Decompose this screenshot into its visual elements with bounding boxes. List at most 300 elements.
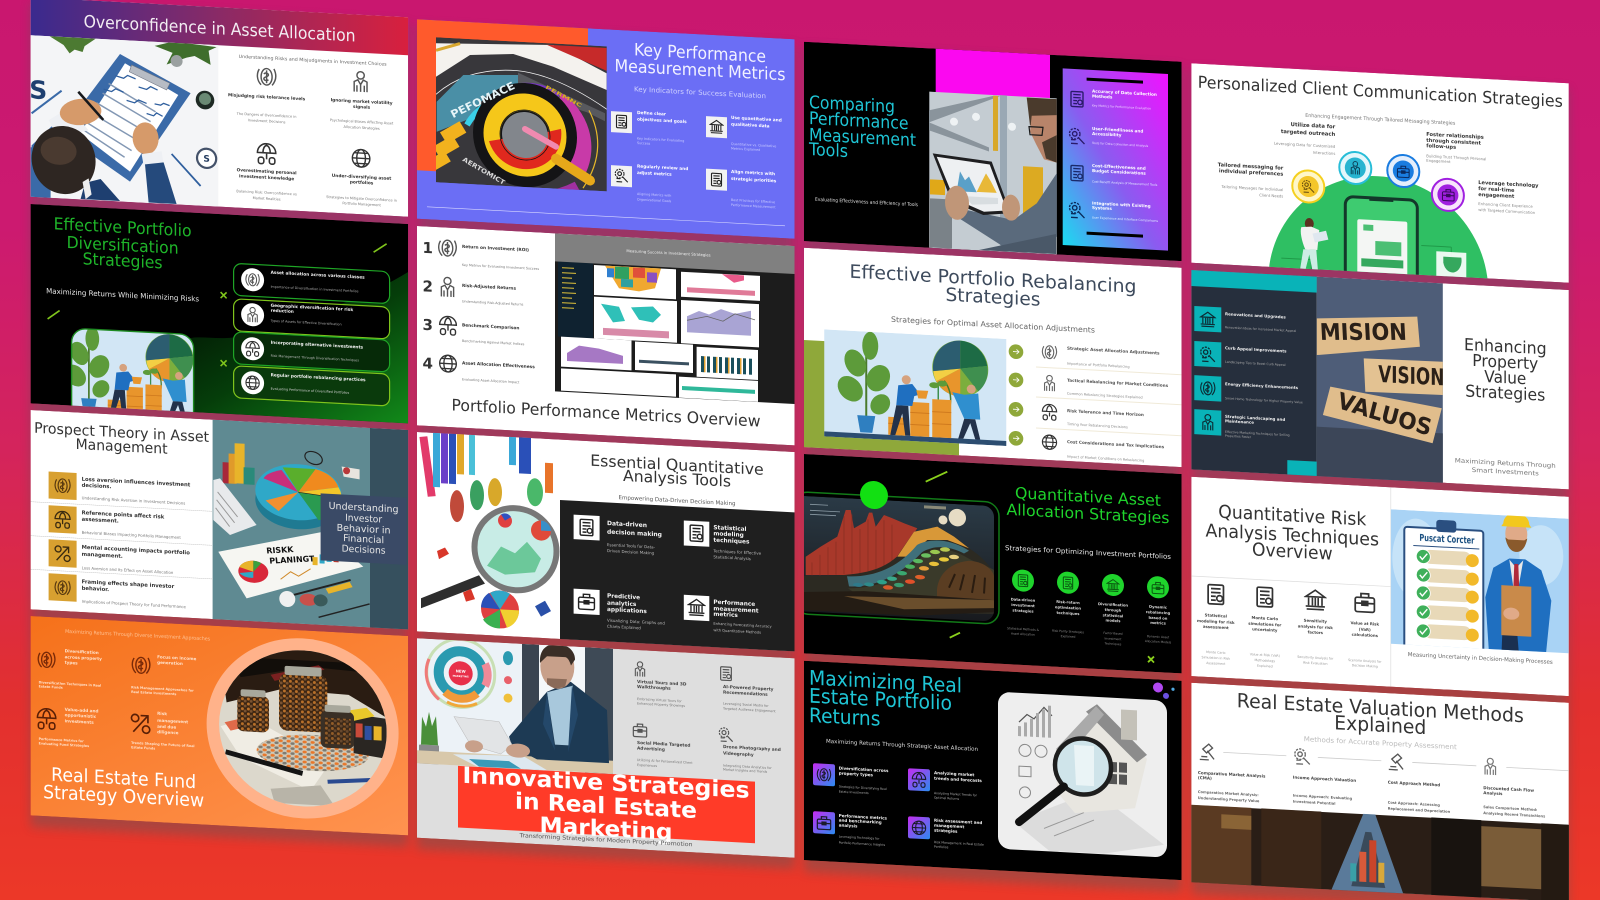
item: value-add: Value-add and (65, 707, 98, 714)
item: framing effects: Framing effects shape investor (82, 579, 175, 590)
card: geographic: Geographic diversification for risk (271, 303, 353, 313)
item: risk-return: techniques (1057, 611, 1080, 616)
item: accuracy: Methods (1092, 93, 1113, 100)
panel: Key Performance Measurement Metrics (417, 19, 794, 239)
item: cost approach: Cost Approach Method (1388, 780, 1440, 787)
photo: dim office with pyramid chart (1191, 805, 1569, 900)
item: loss aversion: Loss aversion influences investment (82, 477, 191, 488)
bars (1087, 78, 1143, 238)
title (850, 262, 1136, 316)
title: Strategies (1465, 382, 1545, 405)
item: performance metrics (813, 811, 887, 847)
item: risk management: and due (157, 724, 176, 730)
item: overestimating (236, 142, 297, 202)
list: rebalancing items: Impact of Market Conditions on Rebalancing (1067, 455, 1144, 463)
title: Comparing (809, 93, 895, 118)
item: cost-effectiveness: Budget Considerations (1092, 168, 1146, 176)
list: rebalancing items: Risk Tolerance and Time Horizon (1067, 408, 1144, 417)
item: curb appeal: Landscaping Tips to Boost Curb Appeal (1225, 360, 1286, 367)
title: Marketing (540, 813, 672, 846)
item: user-friendliness (1070, 125, 1149, 148)
panel: Quantitative Risk Analysis Techniques Overview (1191, 477, 1569, 696)
item: AI-powered (721, 667, 776, 713)
title: Explained (1334, 711, 1426, 739)
card: geographic: reduction (271, 308, 294, 315)
title: Estate Portfolio (809, 683, 952, 715)
title: Real Estate Valuation Methods (1237, 689, 1524, 727)
item: value at risk: calculations (1352, 632, 1379, 638)
item: under-diversifying: Strategies to Mitigate Overconfidence in (326, 195, 397, 203)
item: monte carlo (1248, 587, 1281, 669)
item: comparative market analysis: (CMA) (1198, 775, 1212, 781)
item: framing effects (49, 573, 187, 609)
item: quantitative data: Quantitative vs. Qualitative (731, 142, 776, 148)
callout: understanding investor behavior: Financial (343, 533, 384, 546)
title: Strategy Overview (43, 782, 204, 812)
item: social media: Social Media Targeted (637, 740, 690, 749)
item: social media: Experiences (637, 763, 657, 768)
item: reference points: assessment. (82, 517, 119, 525)
item: under-diversifying: Under-diversifying asset (332, 173, 391, 182)
card: rebalancing: Regular portfolio rebalancing practices (271, 372, 366, 383)
item: define objectives: objectives and goals (637, 116, 687, 125)
text: foster relationships: through consistent (1426, 138, 1481, 147)
dotted dividers (31, 502, 213, 579)
item: define objectives: Define clear (637, 110, 667, 118)
item: data-driven: Data-driven (1011, 597, 1036, 603)
text: utilize data (1274, 121, 1336, 156)
item: data-driven: Essential Tools for Data- (607, 542, 656, 550)
item: diversification: statistical (1103, 613, 1123, 618)
item: curb appeal: Curb Appeal Improvements (1225, 345, 1287, 354)
panel: Prospect Theory in Asset Management (31, 410, 409, 630)
item: curb appeal (1194, 341, 1287, 371)
item: align metrics: Align metrics with (731, 169, 775, 177)
item: user-friendliness: Tools for Data Collection and Analysis (1091, 141, 1149, 148)
title: Allocation Strategies (1006, 501, 1170, 527)
item: diversification (813, 763, 889, 796)
item: AI-powered: Targeted Audience Engagement (722, 706, 776, 713)
teal band (1191, 270, 1317, 293)
item: market trends: trends and forecasts (934, 776, 982, 783)
item: data-driven: Driven Decision Making (607, 548, 655, 556)
card: alternative investments (234, 332, 390, 372)
item: align metrics (706, 168, 777, 209)
title: Measurement (809, 125, 916, 151)
title (462, 763, 750, 850)
list: rebalancing items: Strategic Asset Allocation Adjustments (1067, 346, 1160, 356)
item: sensitivity analysis: factors (1308, 629, 1324, 635)
item: value at risk: Decision Making (1352, 663, 1378, 669)
title: Tools (808, 140, 848, 162)
item: comparative market analysis (1198, 744, 1266, 804)
item: risk management (130, 712, 194, 750)
item: discounted cash flow: Discounted Cash Flow (1483, 785, 1534, 793)
item: AI-powered: AI-Powered Property (723, 684, 774, 693)
item: overestimating: Market Realities (253, 196, 281, 202)
item: risk-return: Risk Parity Strategies (1052, 629, 1084, 634)
decorative marks (926, 471, 1154, 663)
item: performance metrics: analysis (839, 823, 858, 829)
illustration: green circle and phone (1268, 170, 1488, 402)
icon ring: cyan (1339, 151, 1371, 185)
photo: pie chart and risk planning: PLANINGT (269, 554, 315, 566)
item: diversification: Estate Investments (839, 790, 869, 795)
subtitle: Strategies for Optimizing Investment Portfolios (1005, 544, 1171, 561)
title: in Real Estate (515, 789, 697, 824)
photo: businessman with tablet (417, 636, 613, 774)
text: foster relationships: Engagement (1426, 158, 1451, 164)
text: leverage technology: for real-time (1478, 186, 1515, 194)
item: dynamic rebalancing: rebalancing (1146, 610, 1171, 615)
item: diversification: property types (839, 771, 874, 777)
panel: Enhancing Property Value Strategies (1191, 270, 1569, 490)
item: energy efficiency: Energy Efficiency Enhancements (1225, 381, 1299, 390)
decorative marks (47, 243, 387, 367)
panel: Overconfidence in Asset Allocation (29, 0, 408, 217)
subtitle: Maximizing Returns Through Strategic Asset Allocation (826, 739, 978, 753)
panel: Quantitative Asset Allocation Strategies (794, 453, 1182, 673)
item: mental accounting: management. (82, 552, 123, 560)
panel: Portfolio Performance Metrics Overview (417, 226, 795, 445)
left dark column (1191, 270, 1317, 477)
item: performance metrics: and benchmarking (839, 818, 882, 825)
list: numbered metrics: 1 (422, 239, 433, 257)
item: monte carlo: Monte Carlo (1252, 615, 1278, 621)
icon ring: blue (1387, 154, 1419, 188)
photo: wooden blocks: VISION (1378, 362, 1444, 391)
item: drone photography (719, 728, 781, 775)
image: gauge (436, 37, 607, 192)
card: asset allocation (234, 263, 390, 304)
list: numbered metrics (422, 239, 539, 385)
title: Portfolio Performance Metrics Overview (451, 395, 760, 431)
list: numbered metrics: Asset Allocation Effectiveness (462, 360, 535, 370)
title: Overconfidence in Asset Allocation (84, 12, 356, 47)
item: statistical modeling: modeling for risk (1197, 618, 1235, 625)
item: value-add (37, 705, 98, 749)
item: discounted cash flow: Sales Comparison Method: (1483, 805, 1538, 812)
item: social media: Utilizing AI for Personalized Client (637, 758, 693, 765)
green block (804, 340, 959, 456)
item: energy efficiency: Smart Home Technology for Higher Property Value (1225, 396, 1303, 404)
title (1206, 501, 1379, 567)
item: align metrics: Best Practices for Effective (731, 198, 775, 204)
item: define objectives: Key Indicators for Evaluating (637, 136, 684, 143)
item: data-driven (574, 515, 662, 556)
item: value-add: Performance Metrics for (39, 737, 84, 743)
subtitle: Transforming Strategies for Modern Property Promotion (518, 833, 693, 848)
item: risk-return: Explained (1061, 634, 1075, 639)
timeline (1223, 752, 1569, 771)
item: strategic landscaping: Properties Faster (1225, 434, 1252, 439)
item: performance metrics: Performance metrics (839, 813, 887, 821)
list: numbered metrics: Key Metrics for Evaluating Investment Success (462, 263, 539, 271)
subtitle (1455, 457, 1556, 478)
item: mental accounting: Loss Aversion and Its Effect on Asset Allocation (82, 565, 174, 575)
item: renovations: Renovation Ideas for Increased Market Appeal (1225, 325, 1296, 333)
item: reference points: Reference points affect risk (82, 510, 165, 521)
item: cost approach (1388, 754, 1451, 814)
panel: Innovative Strategies in Real Estate Marketing (417, 636, 794, 858)
list: rebalancing items: Common Rebalancing Strategies Explained (1067, 392, 1143, 400)
panel: Real Estate Fund Strategy Overview (31, 616, 408, 835)
item: sensitivity analysis: Sensitivity (1304, 618, 1327, 624)
panel: Comparing Performance Measurement Tools (804, 42, 1182, 261)
item: diversification: Strategies for Diversifying Real (839, 785, 887, 791)
photo: man reviewing clipboard (29, 35, 218, 207)
item: strategic landscaping: Strategic Landscaping and (1225, 414, 1285, 422)
item: income approach: Income Approach Valuation (1293, 775, 1356, 783)
item: virtual tours: Virtual Tours and 3D (637, 679, 687, 688)
item: regular review: Organizational Goals (637, 197, 672, 203)
item: ignoring volatility (330, 70, 394, 132)
text: leverage technology: engagement (1478, 192, 1515, 200)
item: quantitative data (706, 114, 782, 153)
photo: man reviewing clipboard: S (203, 154, 210, 165)
item: value at risk: Value at Risk (1351, 620, 1379, 627)
item: sensitivity analysis (1297, 589, 1334, 666)
subtitle: Understanding Risks and Misjudgments in Investment Choices (239, 54, 387, 68)
text: foster relationships: Foster relationships (1426, 132, 1484, 141)
item: social media (633, 724, 693, 770)
list: numbered metrics: Risk-Adjusted Returns (462, 283, 516, 292)
item: strategic landscaping (1194, 409, 1290, 441)
item: statistical modeling: techniques (713, 538, 750, 546)
list: rebalancing items: Timing Your Rebalancing Decisions (1066, 422, 1128, 429)
item: income generation: Real Estate Investments (131, 690, 176, 696)
title (44, 767, 204, 807)
item: align metrics: Performance Measurement (731, 203, 776, 209)
item: sensitivity analysis: Risk Evaluation (1303, 661, 1328, 666)
text: leverage technology: Leverage technology (1478, 180, 1539, 189)
list: numbered metrics: Return on Investment (ROI) (462, 244, 529, 253)
item: statistical modeling: Statistical Analysis (713, 554, 751, 561)
item: integration (1070, 199, 1158, 223)
photo: pie chart and risk planning: RISKK (266, 545, 295, 556)
item: loss aversion: decisions. (82, 483, 111, 490)
title: Returns (809, 703, 880, 731)
item: income generation: Focus on income (157, 654, 197, 661)
item: value at risk (1348, 593, 1382, 669)
text: foster relationships: Building Trust Through Personal (1426, 153, 1486, 161)
image: gauge: AERTOMICT (461, 156, 507, 187)
item: overestimating: Overestimating personal (237, 167, 297, 176)
title: Property (1472, 351, 1539, 373)
item: reference points (49, 505, 181, 540)
item: statistical modeling: modeling (713, 531, 744, 539)
title: Value (1484, 367, 1526, 388)
header band (31, 0, 408, 55)
title (590, 452, 764, 492)
item: ignoring volatility: Allocation Strategies (343, 125, 380, 131)
subtitle: Evaluating Effectiveness and Efficiency of Tools (815, 197, 918, 208)
list: numbered metrics: Benchmark Comparison (462, 322, 519, 331)
item: misjudging risk: Investment Decisions (248, 118, 286, 124)
item: statistical modeling: Monte Carlo (1206, 650, 1225, 655)
item: income approach: Investment Potential (1293, 800, 1335, 806)
item: value-add: opportunistic (65, 712, 97, 719)
item: performance metrics: Portfolio Performance Insights (839, 841, 885, 847)
item: user-friendliness: User-Friendliness and (1092, 126, 1143, 134)
item: drone photography: Videography (723, 751, 754, 758)
item: income approach: Income Approach: Evaluating (1293, 794, 1353, 801)
item: discounted cash flow: Analyzing Recent Transactions (1483, 811, 1545, 818)
text: leverage technology (1478, 180, 1539, 215)
item: drone photography: Market Insights and Trends (723, 768, 768, 774)
dashboard image (555, 233, 795, 404)
title: Effective Portfolio Rebalancing (849, 262, 1136, 298)
item: risk management: Risk (157, 711, 167, 716)
item: statistical modeling: Simulation in Risk (1202, 655, 1230, 661)
item: quantitative data: qualitative data (731, 121, 770, 129)
item: predictive analytics: Predictive (607, 594, 640, 601)
card: asset allocation: Importance of Diversification in Investment Portfolios (271, 285, 359, 293)
item: comparative market analysis: Comparative Market Analysis: (1198, 790, 1259, 797)
card: alternative investments: Risk Management Through Diversification Techniques (271, 354, 359, 362)
item: framing effects: Implications of Prospect Theory for Fund Performance (82, 599, 187, 609)
icon ring: purple (1432, 178, 1464, 212)
subtitle: Key Indicators for Success Evaluation (634, 85, 766, 100)
text: foster relationships: follow-ups (1426, 143, 1456, 151)
item: diversification across property types: Estate Funds (39, 684, 63, 690)
item: accuracy (1071, 87, 1157, 111)
item: diversification across property types: types (65, 660, 78, 666)
list: numbered metrics: 3 (422, 316, 433, 334)
item: cost approach: Replacement and Depreciation (1388, 807, 1451, 814)
item: diversification: Diversification across (839, 766, 889, 773)
item: data-driven: investment (1011, 603, 1035, 608)
title: Prospect Theory in Asset (34, 421, 209, 446)
item: mental accounting (49, 539, 190, 576)
panel: Real Estate Valuation Methods Explained (1191, 683, 1569, 900)
title: Real Estate Fund (51, 765, 196, 793)
item: comparative market analysis: Understanding Property Value (1198, 796, 1260, 803)
item: comparative market analysis: Comparative Market Analysis (1198, 770, 1266, 779)
title (809, 665, 962, 735)
decorative bubbles (1153, 682, 1175, 699)
title (1237, 689, 1524, 744)
image: house and magnifier (998, 692, 1167, 858)
title: Management (76, 437, 168, 458)
item: define objectives: Success (637, 141, 651, 146)
item: monte carlo: uncertainty (1252, 626, 1278, 633)
item: statistical modeling: Assessment (1206, 661, 1226, 666)
item: under-diversifying: portfolios (350, 179, 374, 186)
item: statistical modeling: assessment (1203, 624, 1229, 630)
text: leverage technology: with Targeted Communication (1478, 207, 1536, 215)
title (1464, 335, 1547, 405)
image: gauge: PERMNC (544, 85, 583, 110)
photo: businessman with tablet: MARKETING (453, 675, 469, 679)
item: user-friendliness: Accessibility (1092, 131, 1122, 138)
item: misjudging risk (228, 67, 306, 125)
item: reference points: Behavioral Biases Impacting Portfolio Management (82, 530, 181, 540)
card: rebalancing (234, 366, 390, 406)
photo: businessman with tablet: NEW (456, 668, 466, 674)
item: quantitative data: Use quantitative and (731, 115, 782, 124)
item: performance metrics: Performance (713, 600, 755, 608)
text: leverage technology: Enhancing Client Experience (1478, 201, 1533, 209)
item: ignoring volatility: Psychological Biases Affecting Asset (330, 118, 394, 126)
item: dynamic rebalancing (1145, 576, 1172, 644)
item: market trends: Analyzing market (934, 770, 974, 777)
item: dynamic rebalancing: based on (1149, 616, 1168, 621)
panel: Personalized Client Communication Strategies (1191, 63, 1569, 406)
item: predictive analytics (574, 589, 665, 632)
list: numbered metrics: Understanding Risk-Adjusted Returns (462, 299, 524, 307)
item: cost-effectiveness: Cost-Effectiveness and (1092, 163, 1146, 171)
item: ignoring volatility: Ignoring market volatility (331, 97, 393, 106)
item: risk management: diligence (157, 729, 179, 735)
title (36, 422, 209, 454)
item: accuracy: Accuracy of Data Collection (1092, 88, 1157, 97)
callout: understanding investor behavior: Decisions (342, 543, 386, 557)
item: virtual tours (635, 662, 687, 708)
title (55, 217, 191, 270)
card: geographic (234, 299, 390, 339)
item: data-driven: Data-driven (607, 520, 647, 529)
item: risk assessment: Portfolios (934, 845, 949, 849)
panel: gradient list (1063, 68, 1168, 251)
item: data-driven: strategies (1012, 609, 1034, 614)
item: performance metrics: with Quantitative Methods (713, 628, 761, 635)
title (808, 93, 916, 166)
subtitle: Enhancing Engagement Through Tailored Messaging Strategies (1305, 113, 1456, 127)
title: Quantitative Asset (1015, 484, 1161, 510)
title: Strategies (83, 249, 163, 272)
orange block (417, 19, 588, 179)
item: predictive analytics: applications (607, 607, 647, 615)
callout: understanding investor behavior: Investor (345, 513, 382, 526)
item: monte carlo: simulations for (1248, 621, 1281, 627)
subtitle: Measuring Uncertainty in Decision-Making Processes (1408, 652, 1553, 666)
list: rebalancing items (1042, 344, 1169, 464)
item: AI-powered: Recommendations (723, 690, 768, 698)
title: Personalized Client Communication Strategies (1198, 73, 1563, 111)
item: virtual tours: Walkthroughs (637, 684, 671, 692)
illustration: inspector with checklist (1391, 506, 1569, 662)
item: risk management: management (157, 718, 188, 724)
subtitle: Maximizing Returns Through Diverse Investment Approaches (65, 629, 210, 643)
photo: wooden blocks (1317, 277, 1444, 483)
title: Enhancing (1464, 335, 1547, 358)
title (1006, 484, 1170, 527)
photo: wooden blocks: VALUOS (1335, 389, 1434, 442)
title (616, 43, 785, 80)
callout: understanding investor behavior: Behavior in (337, 523, 391, 537)
item: value at risk: Scenario Analysis for (1348, 658, 1382, 664)
title: Performance (809, 109, 908, 134)
item: diversification across property types: Diversification Techniques in Real (39, 680, 101, 688)
title: Overview (1252, 539, 1333, 565)
item: loss aversion: Understanding Risk Aversion in Investment Decisions (82, 495, 185, 506)
text: tailored messaging: Client Needs (1259, 192, 1283, 199)
item: discounted cash flow: Analysis (1483, 790, 1503, 796)
subtitle: Strategies for Optimal Asset Allocation Adjustments (891, 315, 1095, 335)
item: diversification: Factor-Based (1103, 631, 1123, 636)
item: align metrics: strategic priorities (731, 176, 777, 184)
subtitle: Maximizing Returns Through (1455, 457, 1556, 470)
item: overestimating: Balancing Risk: Overconfidence vs (236, 189, 297, 196)
item: statistical modeling (1197, 584, 1235, 667)
item: dynamic rebalancing: metrics (1150, 621, 1167, 626)
item: income generation: Risk Management Approaches for (131, 685, 194, 693)
panel: Effective Portfolio Diversification Strategies (31, 204, 408, 436)
list: rebalancing items: Tactical Rebalancing for Market Conditions (1067, 378, 1169, 388)
item: statistical modeling: Statistical (1205, 612, 1227, 619)
title: Analysis Techniques (1206, 520, 1379, 551)
